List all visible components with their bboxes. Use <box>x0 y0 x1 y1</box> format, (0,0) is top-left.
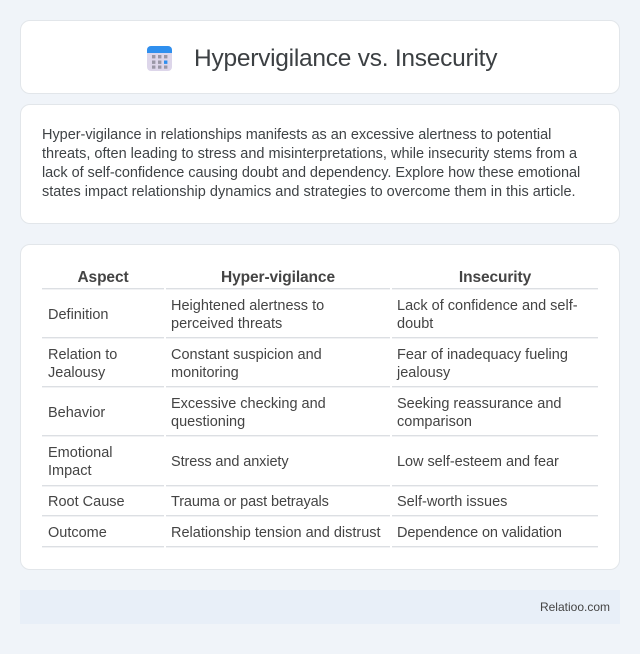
row: root cause: Trauma or past betrayals <box>171 494 329 510</box>
row: behavior: questioning <box>171 414 245 430</box>
row: root cause: Self-worth issues <box>397 494 507 510</box>
panel: intro <box>20 104 620 224</box>
row: definition: doubt <box>397 316 433 332</box>
row: relation to jealousy: monitoring <box>171 365 239 381</box>
row: outcome: Relationship tension and distrust <box>171 525 381 541</box>
row: root cause <box>48 494 507 510</box>
icon: calendar <box>147 46 172 71</box>
row: root cause: Root Cause <box>48 494 125 510</box>
row: definition: Heightened alertness to <box>171 298 324 314</box>
row: emotional impact: Impact <box>48 463 92 479</box>
table headers: Aspect <box>77 269 129 286</box>
row: definition: Definition <box>48 307 108 323</box>
row: relation to jealousy: Constant suspicion and <box>171 347 322 363</box>
intro text <box>42 127 580 200</box>
intro text: lack of self-confidence causing doubt and dependency. Explore how these emotional <box>42 165 580 181</box>
row: outcome: Outcome <box>48 525 107 541</box>
row: relation to jealousy <box>48 347 568 381</box>
row: emotional impact: Low self-esteem and fear <box>397 454 559 470</box>
intro text: threats, often leading to stress and misinterpretations, while insecurity stems from a <box>42 146 577 162</box>
panel: comparison table <box>20 244 620 570</box>
row: behavior: comparison <box>397 414 472 430</box>
row: emotional impact: Emotional <box>48 445 112 461</box>
row: definition <box>48 298 578 332</box>
row: behavior <box>48 396 561 430</box>
intro text: states impact relationship dynamics and strategies to overcome them in this article. <box>42 184 576 200</box>
row: definition: Lack of confidence and self- <box>397 298 578 314</box>
footer bar <box>20 590 620 624</box>
panel: title <box>20 20 620 94</box>
row: outcome <box>48 525 562 541</box>
row: outcome: Dependence on validation <box>397 525 562 541</box>
row: behavior: Excessive checking and <box>171 396 326 412</box>
row: emotional impact <box>48 445 559 479</box>
row: behavior: Seeking reassurance and <box>397 396 561 412</box>
row: emotional impact: Stress and anxiety <box>171 454 288 470</box>
table headers: Insecurity <box>459 269 531 286</box>
row: behavior: Behavior <box>48 405 105 421</box>
row: relation to jealousy: Relation to <box>48 347 117 363</box>
intro text: Hyper-vigilance in relationships manifests as an excessive alertness to potential <box>42 127 551 143</box>
footer text: Relatioo.com <box>540 600 610 614</box>
title text: Hypervigilance vs. Insecurity <box>194 45 497 72</box>
table headers: Hyper-vigilance <box>221 269 335 286</box>
row: relation to jealousy: Fear of inadequacy fueling <box>397 347 568 363</box>
row: relation to jealousy: Jealousy <box>48 365 105 381</box>
row: relation to jealousy: jealousy <box>397 365 450 381</box>
table headers <box>77 269 532 286</box>
row: definition: perceived threats <box>171 316 282 332</box>
